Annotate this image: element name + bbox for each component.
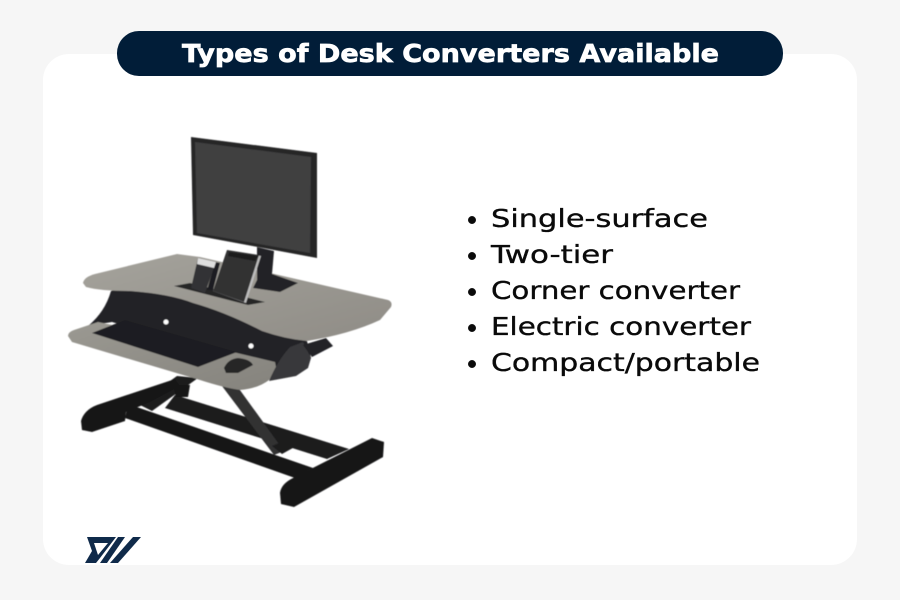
bullet list: converter types bbox=[468, 204, 760, 377]
keyboard bbox=[92, 320, 237, 367]
cable holes bbox=[164, 320, 254, 348]
mouse bbox=[224, 358, 253, 373]
panel: white card bbox=[43, 54, 857, 565]
monitor stand bbox=[253, 247, 298, 292]
rear riser panel bbox=[88, 285, 311, 372]
monitor bbox=[191, 137, 317, 258]
list item: Corner converter: Corner converter bbox=[491, 276, 741, 305]
list item: Electric converter: Electric converter bbox=[491, 312, 752, 341]
lever bbox=[303, 338, 333, 357]
list item: Two-tier bbox=[468, 240, 614, 269]
title banner: Types of Desk Converters Available bbox=[182, 39, 719, 68]
device slot bbox=[174, 283, 265, 305]
base: scissor arms and bars bbox=[125, 376, 349, 478]
list item: Compact/portable: Compact/portable bbox=[491, 348, 760, 377]
right foot bbox=[280, 438, 384, 507]
side bracket bbox=[269, 342, 311, 381]
list item: Two-tier: Two-tier bbox=[490, 240, 614, 269]
desk top surface bbox=[83, 254, 392, 341]
illustration: desk converter bbox=[68, 137, 392, 507]
list item: Single-surface: Single-surface bbox=[491, 204, 708, 233]
keyboard tray bbox=[68, 322, 277, 390]
phone bbox=[191, 258, 220, 293]
left foot bbox=[81, 379, 180, 432]
icon: brand logo bbox=[85, 537, 141, 563]
tablet bbox=[213, 250, 261, 303]
title banner bbox=[117, 31, 783, 76]
